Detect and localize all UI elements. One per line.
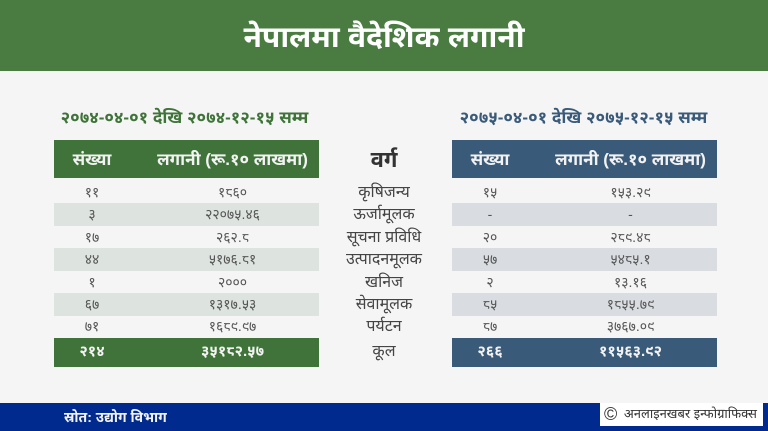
text: ७१ — [85, 318, 99, 334]
left table rows — [54, 184, 319, 334]
right table header: लगानी (रू.१० लाखमा) — [555, 150, 706, 169]
text: १५३.२९ — [610, 184, 651, 200]
right table header — [452, 140, 717, 178]
text: कृषिजन्य — [358, 184, 410, 201]
text: ३७६७.०९ — [607, 318, 654, 334]
text: ५१७६.८१ — [209, 251, 256, 267]
text: - — [488, 206, 492, 222]
text: २२०७५.४६ — [205, 206, 260, 222]
category column heading: वर्ग — [371, 147, 397, 172]
text: सूचना प्रविधि — [347, 229, 421, 246]
text: ६७ — [85, 296, 99, 312]
left table total row: ३५१८२.५७ — [201, 343, 264, 360]
text: २६२.८ — [216, 229, 249, 245]
left table total row — [54, 338, 319, 367]
category labels — [346, 182, 422, 360]
left table total row: २१४ — [79, 343, 105, 360]
left table header: लगानी (रू.१० लाखमा) — [157, 150, 308, 169]
text: उत्पादनमूलक — [346, 251, 422, 268]
right table total row — [452, 338, 717, 367]
right table total row: २६६ — [477, 343, 503, 360]
source note: स्रोत: उद्योग विभाग — [64, 409, 167, 425]
text: २ — [486, 274, 494, 290]
text: १३१७.५३ — [209, 296, 256, 312]
text: १ — [88, 274, 96, 290]
text: ८५ — [483, 296, 497, 312]
text: ५४८५.१ — [610, 251, 651, 267]
left table header: संख्या — [73, 150, 111, 169]
left period heading: २०७४-०४-०१ देखि २०७४-१२-१५ सम्म — [61, 108, 308, 127]
right table total row: ११५६३.९२ — [599, 343, 662, 360]
text: - — [628, 206, 633, 222]
right period heading: २०७५-०४-०१ देखि २०७५-१२-१५ सम्म — [460, 108, 707, 127]
text: कूल — [372, 343, 396, 360]
text: ५७ — [483, 251, 497, 267]
text: १३.१६ — [614, 274, 647, 290]
text: ८७ — [483, 318, 497, 334]
credit box: © अनलाइनखबर इन्फोग्राफिक्स — [604, 404, 757, 424]
text: १८६० — [218, 184, 247, 200]
text: ऊर्जामूलक — [353, 206, 415, 223]
text: ११ — [85, 184, 99, 200]
text: खनिज — [365, 274, 403, 291]
title banner — [0, 0, 768, 71]
footer bar — [0, 403, 768, 431]
text: १६८९.९७ — [209, 318, 256, 334]
text: ४४ — [85, 251, 99, 267]
text: १७ — [85, 229, 99, 245]
text: २८९.४८ — [610, 229, 651, 245]
left table header — [54, 140, 319, 178]
text: २००० — [218, 274, 247, 290]
text: पर्यटन — [366, 318, 402, 335]
text: १८५५.७९ — [607, 296, 654, 312]
text: ३ — [88, 206, 96, 222]
title banner: नेपालमा वैदेशिक लगानी — [243, 21, 525, 54]
text: १५ — [483, 184, 497, 200]
right table rows — [452, 184, 717, 334]
right table header: संख्या — [471, 150, 509, 169]
text: २० — [483, 229, 497, 245]
text: सेवामूलक — [356, 296, 412, 313]
